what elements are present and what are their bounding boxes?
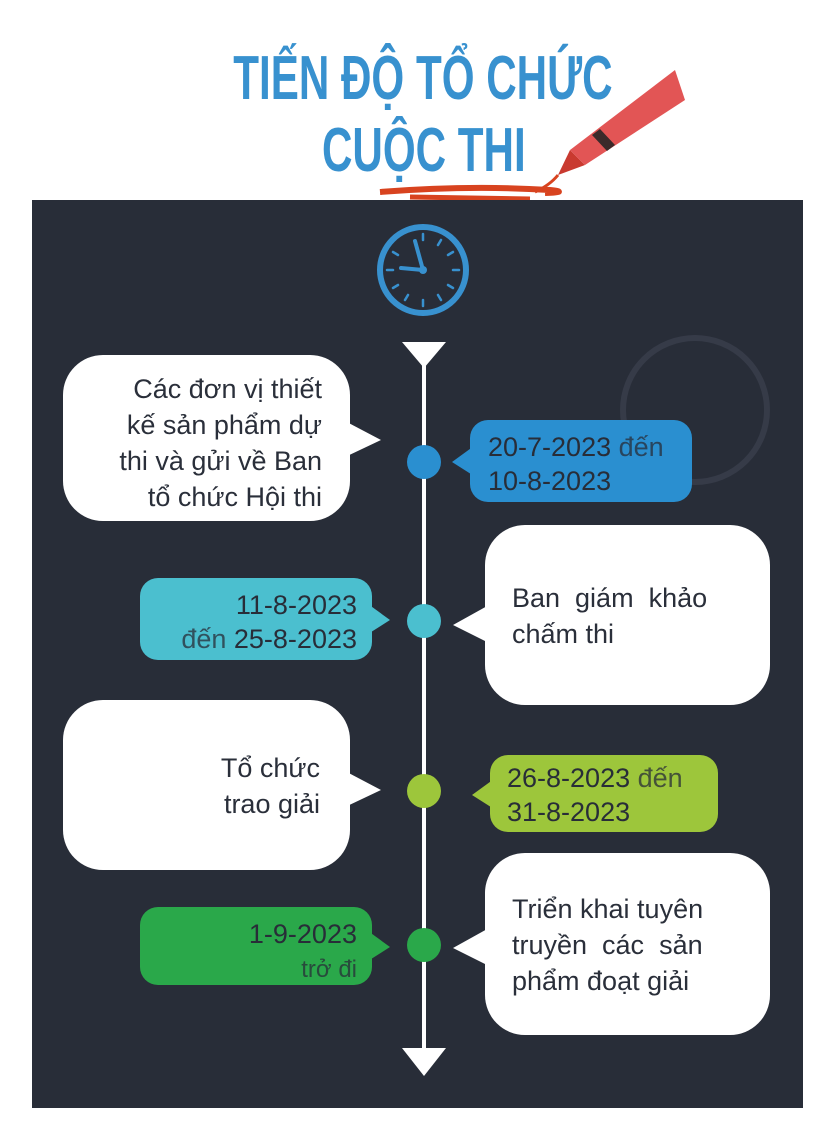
bubble: step 4: truyền các sản [512,930,703,960]
title: TIẾN ĐỘ TỔ CHỨC [233,44,613,113]
bubble: step 4: Triển khai tuyên [512,894,703,924]
bubble: step 2: Ban giám khảo [512,583,707,613]
bubble: step 1: thi và gửi về Ban [119,446,322,476]
date: step 4: trở đi [301,956,357,983]
bubble: step 4: phẩm đoạt giải [512,966,689,996]
icon: clock [377,224,469,316]
bubble: step 1: Các đơn vị thiết [133,374,322,404]
date: step 2 [140,578,372,660]
date: step 4: 1-9-2023 [249,919,357,949]
bubble: step 3 [63,700,350,870]
date: step 3 [490,755,718,832]
icon: crayon [380,70,685,200]
date: step 1: 10-8-2023 [488,466,611,496]
bubble: step 3: trao giải [224,789,320,819]
dot 2 [407,604,441,638]
decorative light bulb [620,335,770,485]
date: step 1 [470,420,692,502]
date: step 2: 11-8-2023 [236,590,357,620]
date: step 3: 26-8-2023 đến [507,763,683,793]
bubble: step 2: chấm thi [512,619,614,649]
date: step 2: đến 25-8-2023 [181,624,357,654]
bubble: step 3: Tổ chức [221,753,320,783]
date: step 1: 20-7-2023 đến [488,432,664,462]
bubble: step 2 [485,525,770,705]
panel: timeline background [32,200,803,1108]
bubble: step 4 [485,853,770,1035]
bubble: step 1: kế sản phẩm dự [127,410,322,440]
dot 3 [407,774,441,808]
timeline axis [402,342,446,1076]
title line 2: CUỘC THI [322,116,526,185]
dot 4 [407,928,441,962]
bubble: step 1 [63,355,350,521]
dot 1 [407,445,441,479]
bubble: step 1: tổ chức Hội thi [148,482,322,512]
date: step 3: 31-8-2023 [507,797,630,827]
date: step 4 [140,907,372,985]
